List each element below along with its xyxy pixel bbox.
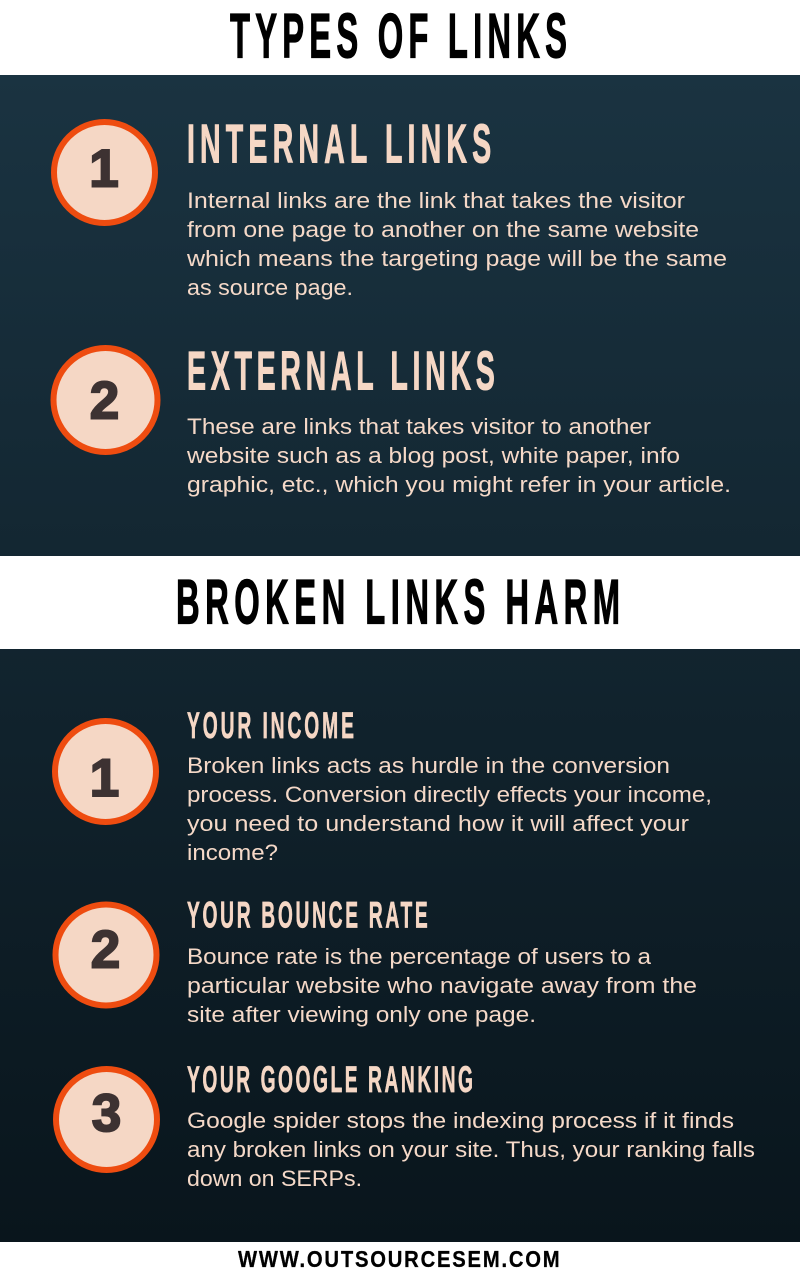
text: your bounce rate description: site after viewing only one page. xyxy=(187,1002,536,1027)
icon: number 2 badge: 2 xyxy=(90,372,119,430)
title: types of links: TYPES OF LINKS xyxy=(230,1,567,71)
text: internal links description: as source page. xyxy=(187,275,353,300)
text: your income description xyxy=(187,753,712,865)
text: your bounce rate description xyxy=(187,944,697,1027)
text: your income description: process. Conversion directly effects your income, xyxy=(187,782,712,807)
text: internal links description xyxy=(186,188,727,300)
text: external links description: website such as a blog post, white paper, info xyxy=(186,443,680,468)
icon: number 2 badge: 2 xyxy=(91,920,120,980)
icon: number 3 badge: 3 xyxy=(92,1084,121,1143)
text: your income description: income? xyxy=(187,840,278,865)
icon: number 1 badge: 1 xyxy=(90,749,119,808)
icon: number 1 badge xyxy=(55,721,156,822)
text: internal links description: which means the targeting page will be the same xyxy=(186,246,727,271)
text: your google ranking description: down on SERPs. xyxy=(187,1166,362,1191)
text: internal links description: from one page to another on the same website xyxy=(187,217,699,242)
icon: number 2 badge xyxy=(54,348,158,452)
text: your income description: you need to understand how it will affect your xyxy=(187,811,690,836)
icon: number 1 badge xyxy=(54,122,155,223)
heading: your income: YOUR INCOME xyxy=(187,705,354,747)
text: your bounce rate description: particular website who navigate away from the xyxy=(187,973,697,998)
panel: broken links harm xyxy=(0,649,800,1242)
text: your bounce rate description: Bounce rate is the percentage of users to a xyxy=(187,944,652,969)
icon: number 1 badge: 1 xyxy=(89,140,119,198)
heading: your google ranking: YOUR GOOGLE RANKING xyxy=(187,1059,473,1101)
text: internal links description: Internal links are the link that takes the visitor xyxy=(187,188,686,213)
item: internal links xyxy=(54,114,727,300)
item: external links xyxy=(54,341,731,497)
title: broken links harm: BROKEN LINKS HARM xyxy=(176,567,620,637)
text: external links description xyxy=(186,414,731,497)
text: your google ranking description xyxy=(187,1108,755,1191)
heading: internal links: INTERNAL LINKS xyxy=(187,114,491,175)
footer: website url: WWW.OUTSOURCESEM.COM xyxy=(238,1246,560,1272)
text: external links description: graphic, etc., which you might refer in your article. xyxy=(187,472,731,497)
heading: your bounce rate: YOUR BOUNCE RATE xyxy=(187,895,428,936)
text: your google ranking description: any broken links on your site. Thus, your ranking falls xyxy=(187,1137,755,1162)
item: your bounce rate xyxy=(56,895,697,1027)
text: your google ranking description: Google spider stops the indexing process if it finds xyxy=(187,1108,734,1133)
item: your google ranking xyxy=(56,1059,755,1191)
heading: external links: EXTERNAL LINKS xyxy=(187,341,495,402)
icon: number 3 badge xyxy=(56,1069,157,1170)
item: your income xyxy=(55,705,712,865)
panel: types of links xyxy=(0,75,800,556)
icon: number 2 badge xyxy=(56,904,156,1006)
text: your income description: Broken links acts as hurdle in the conversion xyxy=(187,753,670,778)
text: external links description: These are links that takes visitor to another xyxy=(187,414,652,439)
